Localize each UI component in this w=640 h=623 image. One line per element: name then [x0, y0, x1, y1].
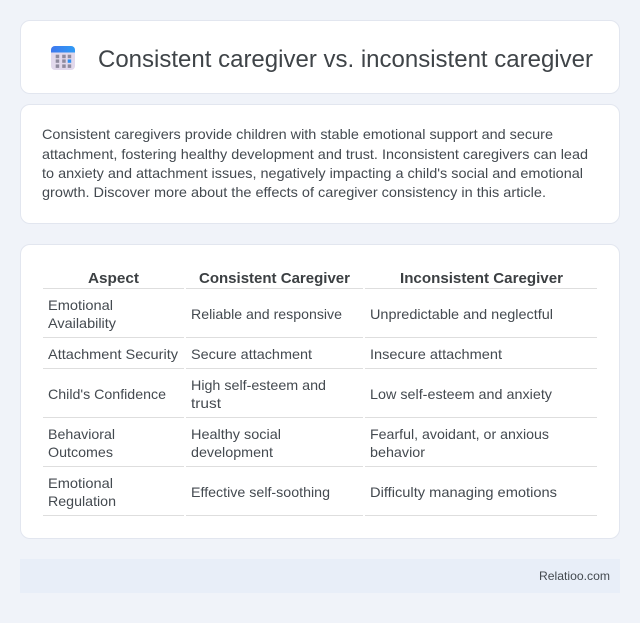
table header: Inconsistent Caregiver — [400, 270, 563, 287]
table header: Aspect — [88, 270, 139, 287]
row: child's confidence: trust — [191, 395, 221, 411]
row: behavioral outcomes: behavior — [370, 444, 425, 460]
intro text: to anxiety and attachment issues, negatively impacting a child's social and emotional — [42, 165, 583, 181]
row: emotional availability — [48, 297, 553, 331]
row: behavioral outcomes: Fearful, avoidant, or anxious — [370, 426, 549, 442]
table card — [20, 244, 620, 539]
row: behavioral outcomes: development — [191, 444, 273, 460]
header card — [20, 20, 620, 94]
row: child's confidence: High self-esteem and — [191, 377, 326, 393]
row: emotional availability: Reliable and responsive — [191, 306, 342, 322]
footer bar — [20, 559, 620, 593]
row: attachment security: Insecure attachment — [370, 346, 502, 362]
title: Consistent caregiver vs. inconsistent caregiver — [98, 46, 593, 73]
row: emotional availability: Unpredictable and neglectful — [370, 306, 553, 322]
footer credit: Relatioo.com — [539, 569, 610, 583]
table header — [88, 270, 563, 287]
table header: Consistent Caregiver — [199, 270, 350, 287]
row: emotional regulation: Regulation — [48, 493, 116, 509]
intro text: Consistent caregivers provide children with stable emotional support and secure — [42, 126, 553, 142]
row: child's confidence — [48, 377, 552, 411]
row: attachment security: Secure attachment — [191, 346, 312, 362]
row: attachment security: Attachment Security — [48, 346, 178, 362]
row: emotional availability: Emotional — [48, 297, 113, 313]
row: behavioral outcomes: Behavioral — [48, 426, 115, 442]
row: emotional regulation — [48, 475, 557, 509]
row: behavioral outcomes: Healthy social — [191, 426, 281, 442]
row: child's confidence: Child's Confidence — [48, 386, 166, 402]
icon: calendar — [51, 46, 75, 70]
row: emotional regulation: Effective self-soothing — [191, 484, 330, 500]
intro text: attachment, fostering healthy development and trust. Inconsistent caregivers can lead — [42, 146, 588, 162]
row: behavioral outcomes — [48, 426, 549, 460]
intro text — [42, 126, 588, 200]
row: child's confidence: Low self-esteem and anxiety — [370, 386, 552, 402]
comparison table — [43, 270, 597, 516]
row: attachment security — [48, 346, 502, 362]
row: emotional regulation: Emotional — [48, 475, 113, 491]
row: emotional availability: Availability — [48, 315, 116, 331]
intro card — [20, 104, 620, 224]
row: emotional regulation: Difficulty managing emotions — [370, 484, 557, 500]
intro text: growth. Discover more about the effects of caregiver consistency in this article. — [42, 184, 546, 200]
row: behavioral outcomes: Outcomes — [48, 444, 113, 460]
